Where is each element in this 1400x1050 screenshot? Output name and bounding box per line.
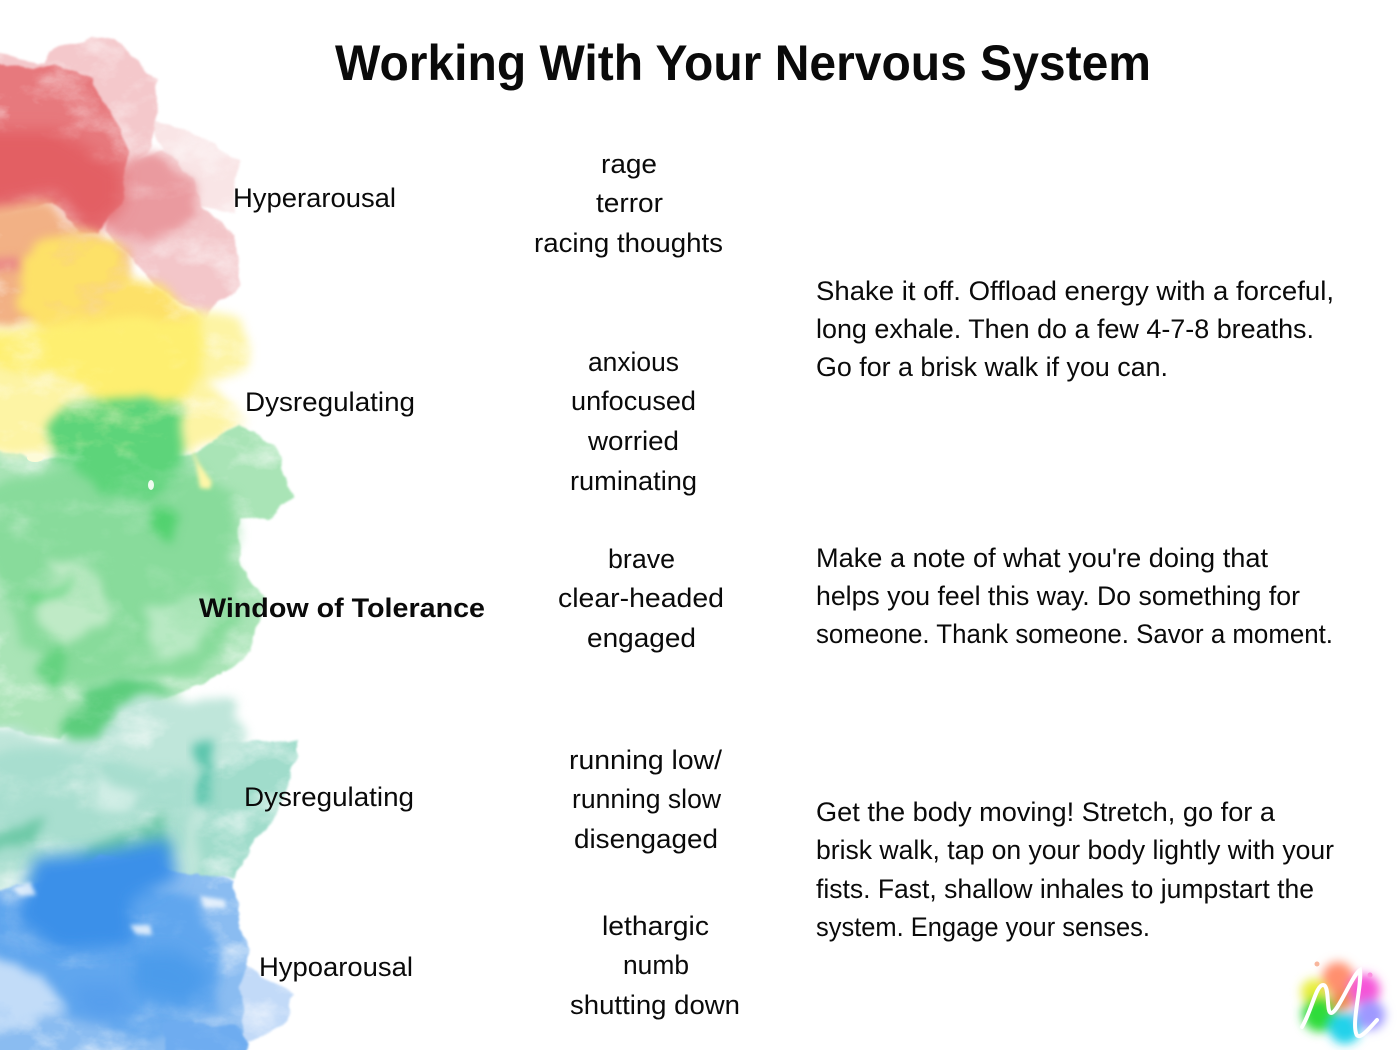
advice: when activated: Shake it off. Offload energy with a forceful, bbox=[816, 276, 1334, 306]
advice: when activated bbox=[816, 276, 1334, 382]
feelings: dysregulating lower: disengaged bbox=[574, 824, 718, 854]
label: dysregulating upper: Dysregulating bbox=[245, 387, 415, 417]
state labels column bbox=[199, 183, 485, 982]
feelings: hypoarousal: shutting down bbox=[570, 990, 740, 1020]
watercolor band: stacked nervous system colours bbox=[0, 37, 298, 1050]
feelings: dysregulating lower: running low/ bbox=[569, 745, 723, 775]
watercolor: red hyperarousal zone bbox=[0, 37, 240, 322]
advice: within window of tolerance: someone. Thank someone. Savor a moment. bbox=[816, 619, 1333, 649]
label: hypoarousal: Hypoarousal bbox=[259, 952, 413, 982]
feelings: hyperarousal bbox=[534, 149, 723, 258]
feelings: dysregulating upper: worried bbox=[587, 426, 679, 456]
feelings: hyperarousal: racing thoughts bbox=[534, 228, 723, 258]
feelings: window of tolerance bbox=[558, 544, 724, 653]
drips bbox=[188, 440, 212, 489]
feelings: window of tolerance: clear-headed bbox=[558, 583, 724, 613]
watercolor: yellow dysregulating zone bbox=[0, 205, 248, 455]
watercolor: green window of tolerance zone bbox=[0, 398, 295, 740]
advice column bbox=[816, 276, 1334, 942]
advice: when activated: long exhale. Then do a few 4-7-8 breaths. bbox=[816, 314, 1314, 344]
advice: when shutting down bbox=[816, 797, 1334, 942]
watercolor: teal lower dysregulating zone bbox=[0, 680, 298, 890]
feelings: hyperarousal: terror bbox=[596, 188, 663, 218]
icon: rainbow watercolor logo bbox=[1301, 962, 1385, 1044]
advice: within window of tolerance: Make a note of what you're doing that bbox=[816, 543, 1268, 573]
label: window of tolerance: Window of Tolerance bbox=[199, 593, 485, 623]
feelings: hyperarousal: rage bbox=[601, 149, 657, 179]
advice: when shutting down: system. Engage your senses. bbox=[816, 912, 1150, 942]
label: dysregulating lower: Dysregulating bbox=[244, 782, 414, 812]
feelings: hypoarousal: lethargic bbox=[602, 911, 709, 941]
feelings: window of tolerance: engaged bbox=[587, 623, 696, 653]
feelings column bbox=[534, 149, 740, 1020]
feelings: dysregulating upper: unfocused bbox=[571, 386, 696, 416]
feelings: dysregulating lower: running slow bbox=[572, 784, 721, 814]
advice: within window of tolerance bbox=[816, 543, 1333, 649]
watercolor: blue hypoarousal zone bbox=[0, 838, 293, 1050]
title: Working With Your Nervous System bbox=[335, 35, 1151, 91]
feelings: dysregulating upper: anxious bbox=[588, 347, 679, 377]
feelings: window of tolerance: brave bbox=[608, 544, 675, 574]
feelings: dysregulating upper bbox=[570, 347, 697, 496]
advice: when shutting down: fists. Fast, shallow inhales to jumpstart the bbox=[816, 874, 1314, 904]
feelings: dysregulating lower bbox=[569, 745, 723, 854]
feelings: hypoarousal: numb bbox=[623, 950, 689, 980]
feelings: hypoarousal bbox=[570, 911, 740, 1020]
advice: when activated: Go for a brisk walk if you can. bbox=[816, 352, 1168, 382]
advice: when shutting down: brisk walk, tap on your body lightly with your bbox=[816, 835, 1334, 865]
feelings: dysregulating upper: ruminating bbox=[570, 466, 697, 496]
label: hyperarousal: Hyperarousal bbox=[233, 183, 396, 213]
white speckles bbox=[12, 882, 226, 935]
advice: when shutting down: Get the body moving! Stretch, go for a bbox=[816, 797, 1276, 827]
advice: within window of tolerance: helps you feel this way. Do something for bbox=[816, 581, 1300, 611]
